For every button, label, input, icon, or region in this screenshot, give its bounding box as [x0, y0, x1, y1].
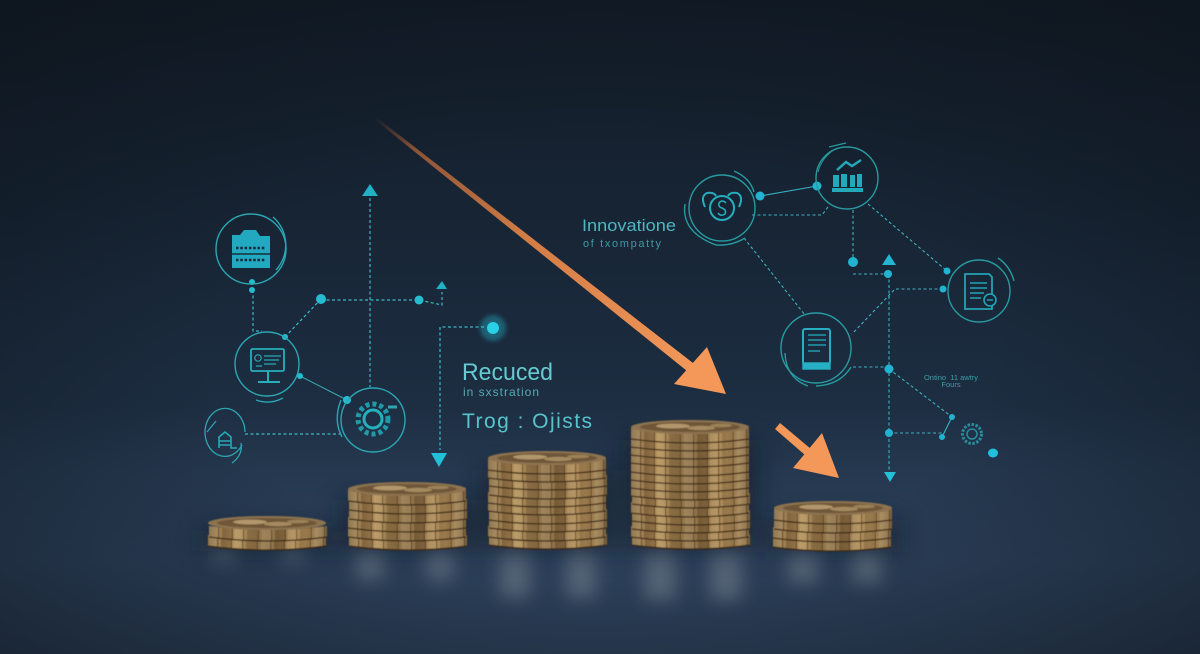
icon: document — [948, 258, 1014, 322]
right heading text — [582, 216, 676, 250]
coin stack 3 — [488, 451, 607, 549]
icon: monitor — [235, 332, 299, 402]
small descending arrow — [775, 423, 839, 478]
icon: dollar alarm clock — [685, 171, 755, 245]
icon: gear — [337, 388, 405, 452]
left network nodes — [249, 279, 424, 404]
coin stack 2 — [348, 482, 467, 550]
left text block — [462, 359, 592, 433]
coin stack 1 — [208, 516, 327, 550]
icon: tablet — [781, 313, 851, 386]
arrow up: right axis — [882, 254, 896, 265]
right network connector lines — [744, 204, 952, 473]
coin stack 5 — [773, 501, 892, 551]
subheading: in sxstration: in sxstration — [463, 385, 539, 399]
small caption — [924, 373, 978, 389]
solid links — [760, 186, 952, 437]
icon: server folder — [216, 214, 286, 284]
small caption: Ontino 11 awtry — [924, 373, 978, 382]
big descending arrow — [374, 117, 726, 394]
icon: analytics chart — [816, 143, 878, 209]
small caption: Fours — [941, 380, 961, 389]
stack shadows — [200, 440, 900, 552]
coin stack 4 — [631, 420, 750, 549]
left network connector lines — [245, 198, 484, 450]
arrow up: left network axis — [362, 184, 378, 196]
solid link: monitor to gear — [300, 376, 347, 400]
arrow down: left network — [431, 453, 447, 467]
glowing node — [480, 315, 506, 341]
heading: Recuced: Recuced — [462, 359, 553, 386]
icon: small flask chart — [205, 408, 245, 463]
arrow up: small left branch — [436, 281, 447, 289]
right network nodes — [756, 182, 998, 458]
subheading: of txompatty: of txompatty — [583, 238, 662, 250]
arrow down: right axis — [884, 472, 896, 482]
coin reflections on the floor — [212, 548, 882, 600]
heading: Innovatione: Innovatione — [582, 216, 676, 235]
label: Trog Ojists: Trog : Ojists — [462, 410, 592, 433]
icon: small gear — [962, 424, 982, 444]
